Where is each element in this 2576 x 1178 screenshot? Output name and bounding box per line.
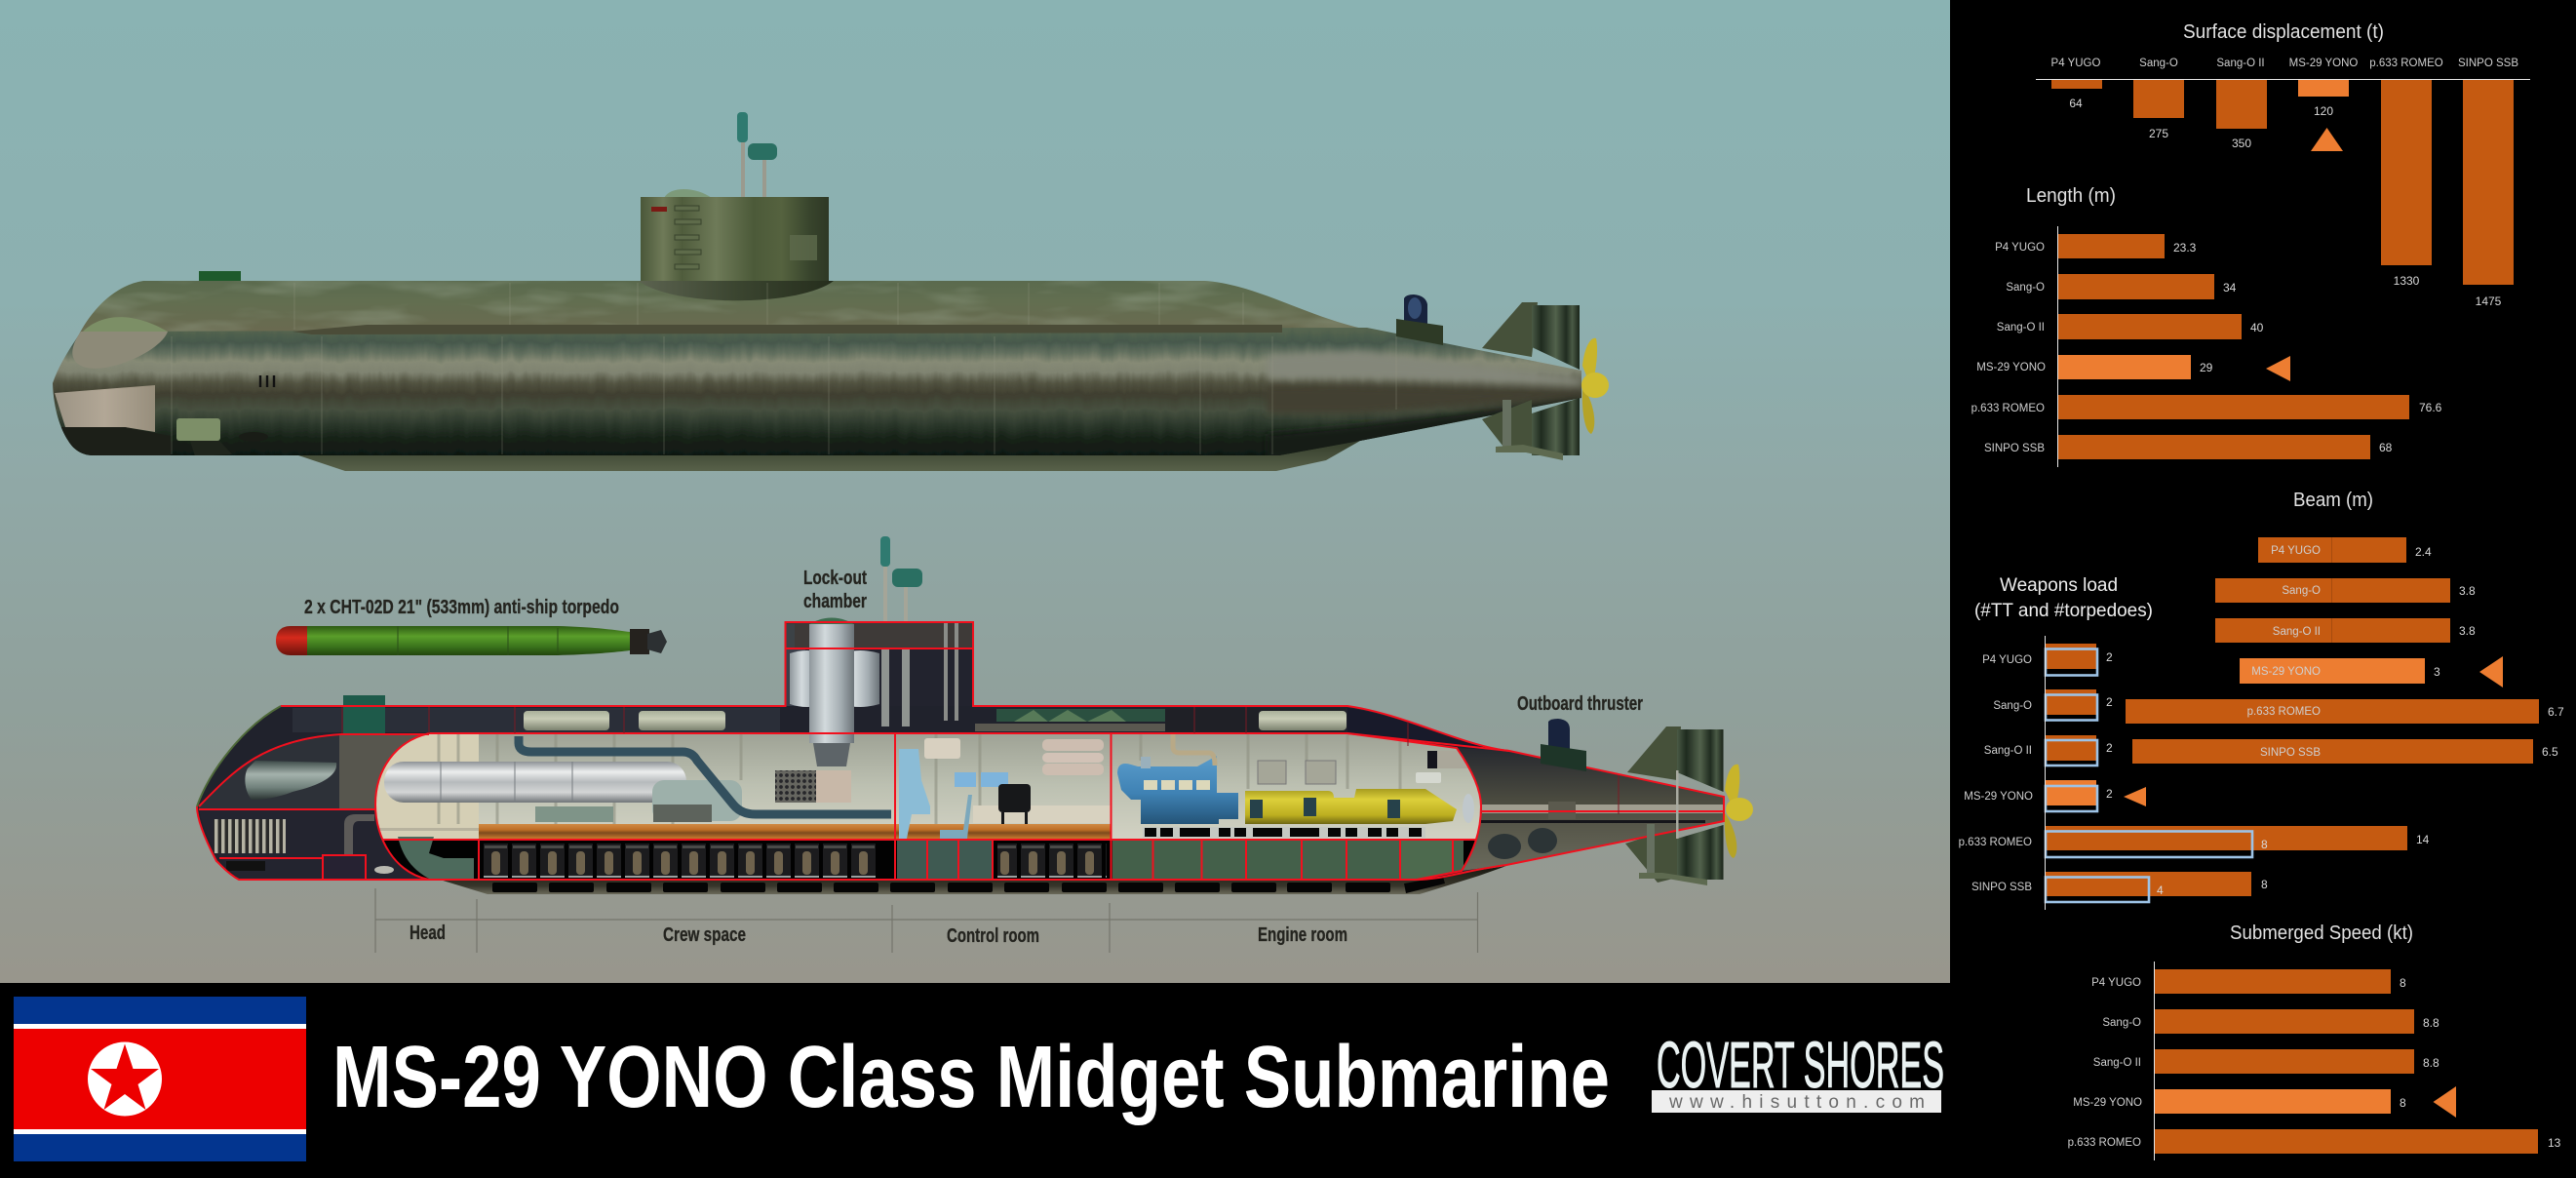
hull panel lines [172, 283, 1396, 454]
category labels: MS-29 YONO [2289, 58, 2358, 69]
values [2400, 976, 2561, 1150]
chart: beam [2126, 490, 2564, 764]
keel with pads [440, 866, 1506, 894]
bars [2126, 537, 2539, 764]
category labels: SINPO SSB [1984, 443, 2045, 454]
axis [2045, 636, 2046, 910]
values: 2 [2106, 741, 2113, 755]
compartment labels [410, 923, 1347, 947]
interior red frames [371, 733, 1487, 880]
category labels: MS-29 YONO [1976, 362, 2046, 373]
category labels: p.633 ROMEO [1959, 837, 2032, 848]
values: 8.8 [2423, 1056, 2439, 1070]
electrical cabinet [775, 770, 851, 803]
category labels: Sang-O II [2216, 58, 2265, 69]
category labels: Sang-O II [1984, 745, 2032, 757]
bars [2057, 226, 2409, 467]
nose dome [72, 317, 168, 369]
category labels: P4 YUGO [1982, 654, 2032, 666]
forward compartment [199, 734, 429, 809]
main title: MS-29 YONO Class Midget Submarine [332, 1029, 1610, 1126]
outboard thruster [1396, 294, 1443, 345]
category labels: Sang-O [2282, 585, 2321, 597]
lock-out chamber [785, 618, 879, 741]
category labels: Sang-O [2139, 58, 2178, 69]
marker arrow [2479, 656, 2503, 687]
values: 8 [2400, 1096, 2406, 1110]
casing air tanks [524, 711, 1347, 730]
lock-out chamber label [803, 568, 867, 612]
chart: length [1971, 185, 2442, 467]
cutaway fins [1625, 726, 1681, 883]
casing camouflaged tube [975, 709, 1165, 731]
red structural outlines [197, 622, 1724, 880]
lower compartment battery bay [371, 840, 1487, 881]
covert shores logo: COVERT SHORES [1657, 1029, 1944, 1102]
vent on casing [199, 271, 241, 281]
values: 3.8 [2459, 584, 2476, 598]
blue diesel engine [1117, 756, 1238, 824]
casing upper hull [79, 281, 1358, 334]
cutaway sail interior [786, 623, 972, 721]
category labels [1971, 242, 2046, 454]
chart title: (#TT and #torpedoes) [1974, 601, 2153, 621]
compartment labels: Crew space [663, 924, 746, 946]
values: 8 [2400, 976, 2406, 990]
category labels: p.633 ROMEO [2369, 58, 2443, 69]
values: 6.5 [2542, 745, 2558, 759]
values: 13 [2548, 1136, 2561, 1150]
compartment labels: Head [410, 923, 446, 944]
control room [899, 738, 1111, 839]
compartment labels: Control room [947, 925, 1039, 947]
lock-out chamber label: Lock-out [803, 568, 867, 589]
values [2069, 97, 2502, 308]
compartment labels: Engine room [1258, 924, 1347, 946]
values: 3.8 [2459, 624, 2476, 638]
category labels: Sang-O [2102, 1017, 2141, 1029]
category labels: MS-29 YONO [2073, 1097, 2142, 1109]
values: 68 [2379, 441, 2393, 454]
category labels: SINPO SSB [1971, 882, 2032, 893]
lower tail fin [1482, 400, 1532, 451]
lower stabilizer [1496, 400, 1563, 460]
bars [2036, 79, 2530, 285]
values: 2 [2106, 787, 2113, 801]
category labels: p.633 ROMEO [1971, 403, 2045, 414]
category labels: p.633 ROMEO [2247, 706, 2321, 718]
values: 23.3 [2173, 241, 2197, 255]
chart title: Submerged Speed (kt) [2230, 923, 2413, 944]
values: 1330 [2394, 274, 2420, 288]
chart title: Surface displacement (t) [2183, 21, 2384, 43]
category labels: P4 YUGO [1995, 242, 2045, 254]
chart: submerged speed [2068, 923, 2561, 1160]
values: 2 [2106, 650, 2113, 664]
propeller [1581, 338, 1609, 434]
lockers [1258, 761, 1336, 784]
covert shores logo: www.hisutton.com [1668, 1092, 1925, 1113]
category labels: P4 YUGO [2091, 977, 2141, 989]
values: 120 [2314, 104, 2333, 118]
cutaway submarine [197, 536, 1753, 894]
values [2106, 650, 2430, 897]
flag of North Korea [14, 997, 306, 1161]
lock-out trunk base [809, 733, 854, 766]
casing step stripe [293, 325, 1282, 334]
lower rudder [1532, 398, 1580, 455]
background panel: scene gradient [0, 0, 1950, 983]
forward pump [398, 837, 474, 879]
category labels: Sang-O II [1997, 322, 2045, 334]
values: 29 [2200, 361, 2213, 374]
category labels: MS-29 YONO [1964, 791, 2033, 803]
category labels: P4 YUGO [2051, 58, 2101, 69]
head lower compartments [199, 809, 429, 880]
values: 40 [2250, 321, 2264, 334]
lock-out chamber label: chamber [803, 591, 867, 612]
values [2415, 545, 2564, 759]
upper rudder [1532, 305, 1580, 370]
category labels: SINPO SSB [2260, 747, 2321, 759]
battery rows [484, 844, 1107, 879]
cutaway outboard thruster [1541, 719, 1586, 771]
ballast tanks [897, 841, 1464, 880]
sail [641, 197, 829, 281]
equipment below tank [535, 780, 742, 822]
chart title: Beam (m) [2293, 490, 2373, 511]
chart: weapons load [1959, 575, 2430, 910]
casing interior panels [293, 708, 1506, 751]
cutaway masts [880, 536, 922, 625]
values: 8 [2261, 878, 2268, 891]
cutaway mast shafts [881, 648, 910, 726]
values: 8.8 [2423, 1016, 2439, 1030]
values: 1475 [2476, 294, 2502, 308]
hull shell [197, 622, 1724, 880]
values [2173, 241, 2442, 454]
category labels: MS-29 YONO [2251, 666, 2321, 678]
values: 2 [2106, 695, 2113, 709]
marker arrow [2124, 787, 2146, 806]
values: 76.6 [2419, 401, 2442, 414]
torpedo bars [2046, 644, 2407, 896]
marker arrow [2266, 356, 2290, 381]
casing vent [343, 695, 385, 733]
category labels [2051, 58, 2518, 69]
category labels: P4 YUGO [2271, 545, 2321, 557]
pressure hull [53, 328, 1581, 455]
category labels: Sang-O II [2093, 1057, 2141, 1069]
category labels: p.633 ROMEO [2068, 1137, 2141, 1149]
chart title: Length (m) [2026, 185, 2116, 207]
cutaway stabilizer [1639, 824, 1707, 885]
silver tank [384, 762, 686, 803]
chart title [1974, 575, 2153, 621]
category labels [1959, 654, 2033, 893]
exterior submarine side view [29, 0, 1609, 488]
values: 275 [2149, 127, 2168, 140]
main pressure hull interior [371, 731, 1487, 881]
interior frames [439, 733, 1400, 824]
values: 8 [2261, 838, 2268, 851]
values: 64 [2069, 97, 2083, 110]
outboard thruster label: Outboard thruster [1517, 693, 1643, 715]
category labels [2247, 545, 2321, 759]
values: 2.4 [2415, 545, 2432, 559]
yellow generator [1245, 789, 1457, 824]
category labels: Sang-O [1993, 700, 2032, 712]
tail section [1347, 733, 1724, 871]
values: 14 [2416, 833, 2430, 846]
cutaway propeller [1725, 765, 1753, 858]
category labels: Sang-O II [2273, 626, 2321, 638]
marker arrow [2434, 1086, 2456, 1118]
cutaway rudders [1676, 729, 1724, 880]
values: 350 [2232, 137, 2251, 150]
sail fairing [639, 281, 834, 300]
torpedo illustration [276, 626, 667, 655]
values: 6.7 [2548, 705, 2564, 719]
category labels: Sang-O [2006, 282, 2045, 294]
category labels [2068, 977, 2142, 1149]
torpedo label: 2 x CHT-02D 21" (533mm) anti-ship torpedo [304, 597, 619, 618]
compartment dimension lines [375, 888, 1478, 953]
hatch dome on sail [664, 189, 712, 198]
keel strake [298, 441, 1360, 471]
masts [737, 112, 777, 198]
orange deck [479, 824, 1111, 839]
bars [2154, 962, 2538, 1160]
chart: surface displacement [2036, 21, 2530, 308]
values: 34 [2223, 281, 2237, 294]
blue pipe [519, 736, 891, 814]
values: 3 [2434, 665, 2440, 679]
brass exhaust pipe [1173, 733, 1215, 766]
upper tail fin [1482, 302, 1538, 357]
black floor bays [1143, 827, 1425, 838]
marker arrow [2311, 128, 2343, 151]
covert shores logo [1652, 1029, 1944, 1113]
category labels: SINPO SSB [2458, 58, 2518, 69]
torpedo tube outlines [2046, 649, 2252, 902]
chart title: Weapons load [2000, 575, 2118, 596]
thruster motor housing [1416, 751, 1474, 823]
values: 4 [2157, 884, 2164, 897]
